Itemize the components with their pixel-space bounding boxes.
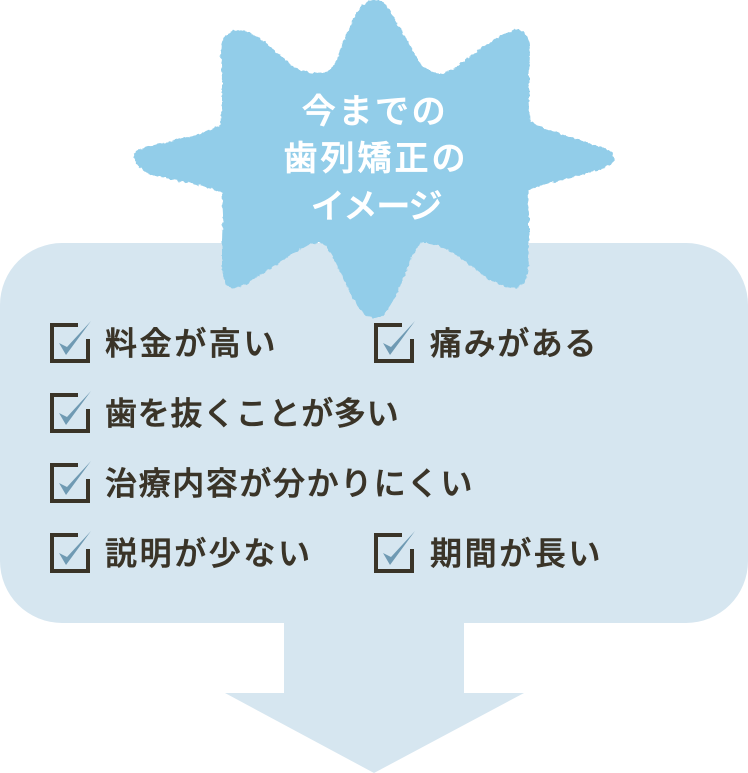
arrow: pointing down [225, 623, 524, 773]
title: star heading: 歯列矯正の [284, 140, 468, 178]
checklist item: 痛みがある [376, 321, 598, 362]
checklist item: 歯を抜くことが多い: 歯を抜くことが多い [105, 396, 399, 432]
checklist item: 説明が少ない: 説明が少ない [105, 536, 313, 572]
title: star heading [284, 93, 468, 226]
title: star heading: イメージ [311, 188, 441, 226]
panel: rounded box [0, 243, 748, 623]
checklist item: 痛みがある: 痛みがある [430, 326, 598, 362]
checklist item: 料金が高い: 料金が高い [105, 326, 278, 362]
icon: spiky star badge [134, 0, 614, 318]
title: star heading: 今までの [302, 93, 448, 131]
checklist item: 料金が高い [52, 321, 278, 362]
checklist item: 治療内容が分かりにくい: 治療内容が分かりにくい [105, 466, 474, 502]
checklist item: 期間が長い: 期間が長い [430, 536, 603, 572]
checklist item: 期間が長い [376, 531, 603, 572]
panel: checklist background with arrow [0, 243, 748, 773]
